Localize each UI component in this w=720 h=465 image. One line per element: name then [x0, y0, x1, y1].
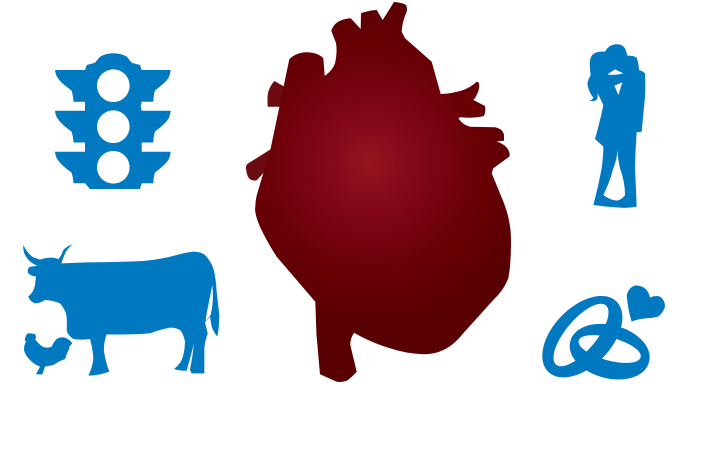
heart lower left vessel [246, 149, 271, 181]
cow tail gap [206, 285, 213, 321]
icon: cow and rooster [23, 244, 219, 376]
cow [23, 244, 219, 376]
heart upper left vessel [267, 81, 285, 107]
rooster [24, 333, 72, 374]
icon: heart [246, 2, 511, 382]
small heart [627, 285, 665, 322]
ring: large [542, 296, 622, 377]
ring: small [570, 324, 650, 379]
icon: traffic light [55, 53, 171, 189]
icon: kissing couple [587, 44, 645, 208]
heart body [255, 2, 511, 382]
icon: wedding rings with heart [542, 285, 665, 379]
